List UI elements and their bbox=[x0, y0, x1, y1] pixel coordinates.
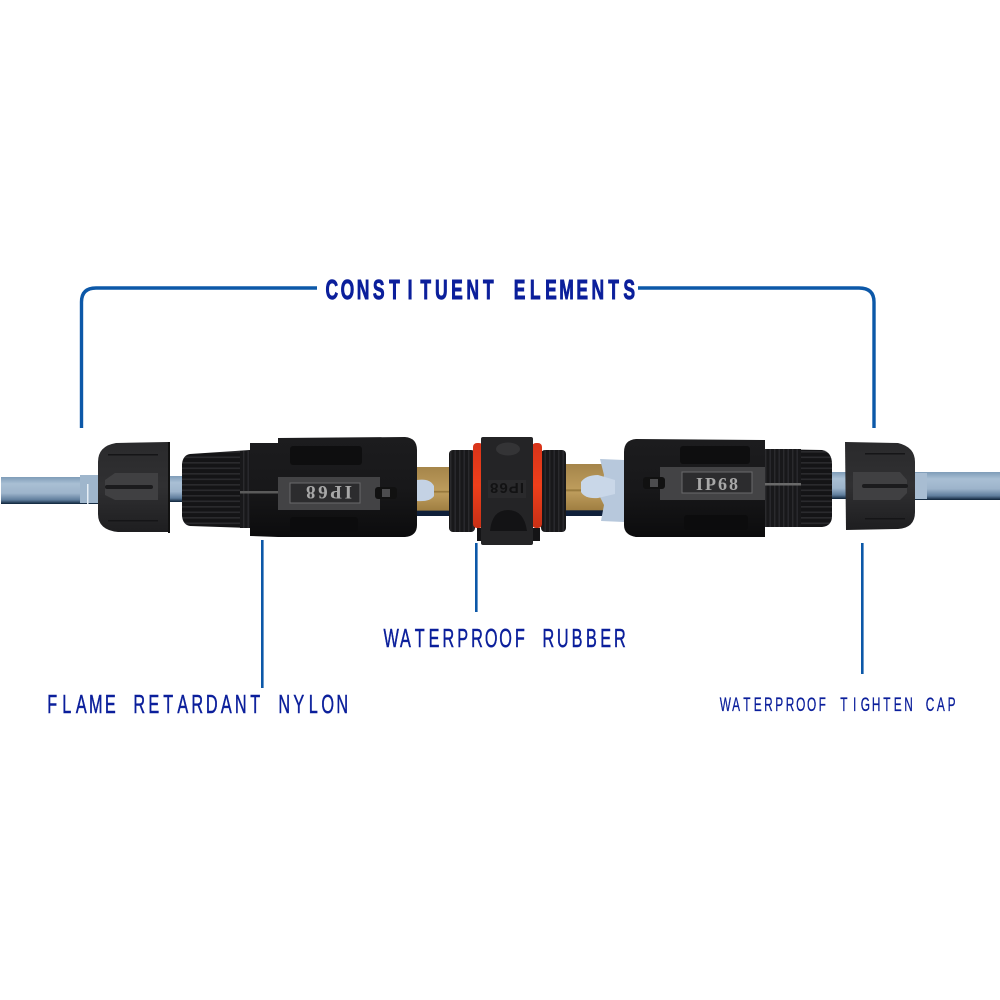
leader: waterproof rubber bbox=[475, 543, 478, 612]
right IP68 plate: IP68 bbox=[696, 474, 738, 494]
center marking: IP68 bbox=[490, 479, 524, 496]
right cable bbox=[830, 472, 1000, 500]
right white clip bbox=[581, 459, 624, 522]
bracket: constituent elements bbox=[82, 288, 874, 428]
leader: flame retardant nylon bbox=[261, 540, 264, 688]
label: flame retardant nylon: FLAME RETARDANT NYLON bbox=[47, 689, 348, 719]
left cable bbox=[1, 475, 186, 504]
label: waterproof tighten cap: WATERPROOF TIGHTEN CAP bbox=[720, 695, 956, 716]
left tighten cap bbox=[98, 442, 170, 533]
leader: waterproof tighten cap bbox=[861, 543, 864, 674]
title: CONSTITUENT ELEMENTS bbox=[325, 274, 635, 305]
right tighten cap bbox=[845, 442, 915, 530]
left white clip bbox=[417, 480, 434, 501]
left IP68 plate: IP68 bbox=[306, 481, 352, 502]
left IP68 plate bbox=[278, 477, 397, 510]
center coupler bbox=[449, 437, 566, 545]
gold terminals bbox=[415, 464, 604, 516]
label: waterproof rubber: WATERPROOF RUBBER bbox=[383, 623, 626, 653]
right IP68 plate bbox=[643, 467, 765, 500]
right nylon gland bbox=[624, 439, 832, 537]
left nylon gland bbox=[182, 437, 417, 537]
